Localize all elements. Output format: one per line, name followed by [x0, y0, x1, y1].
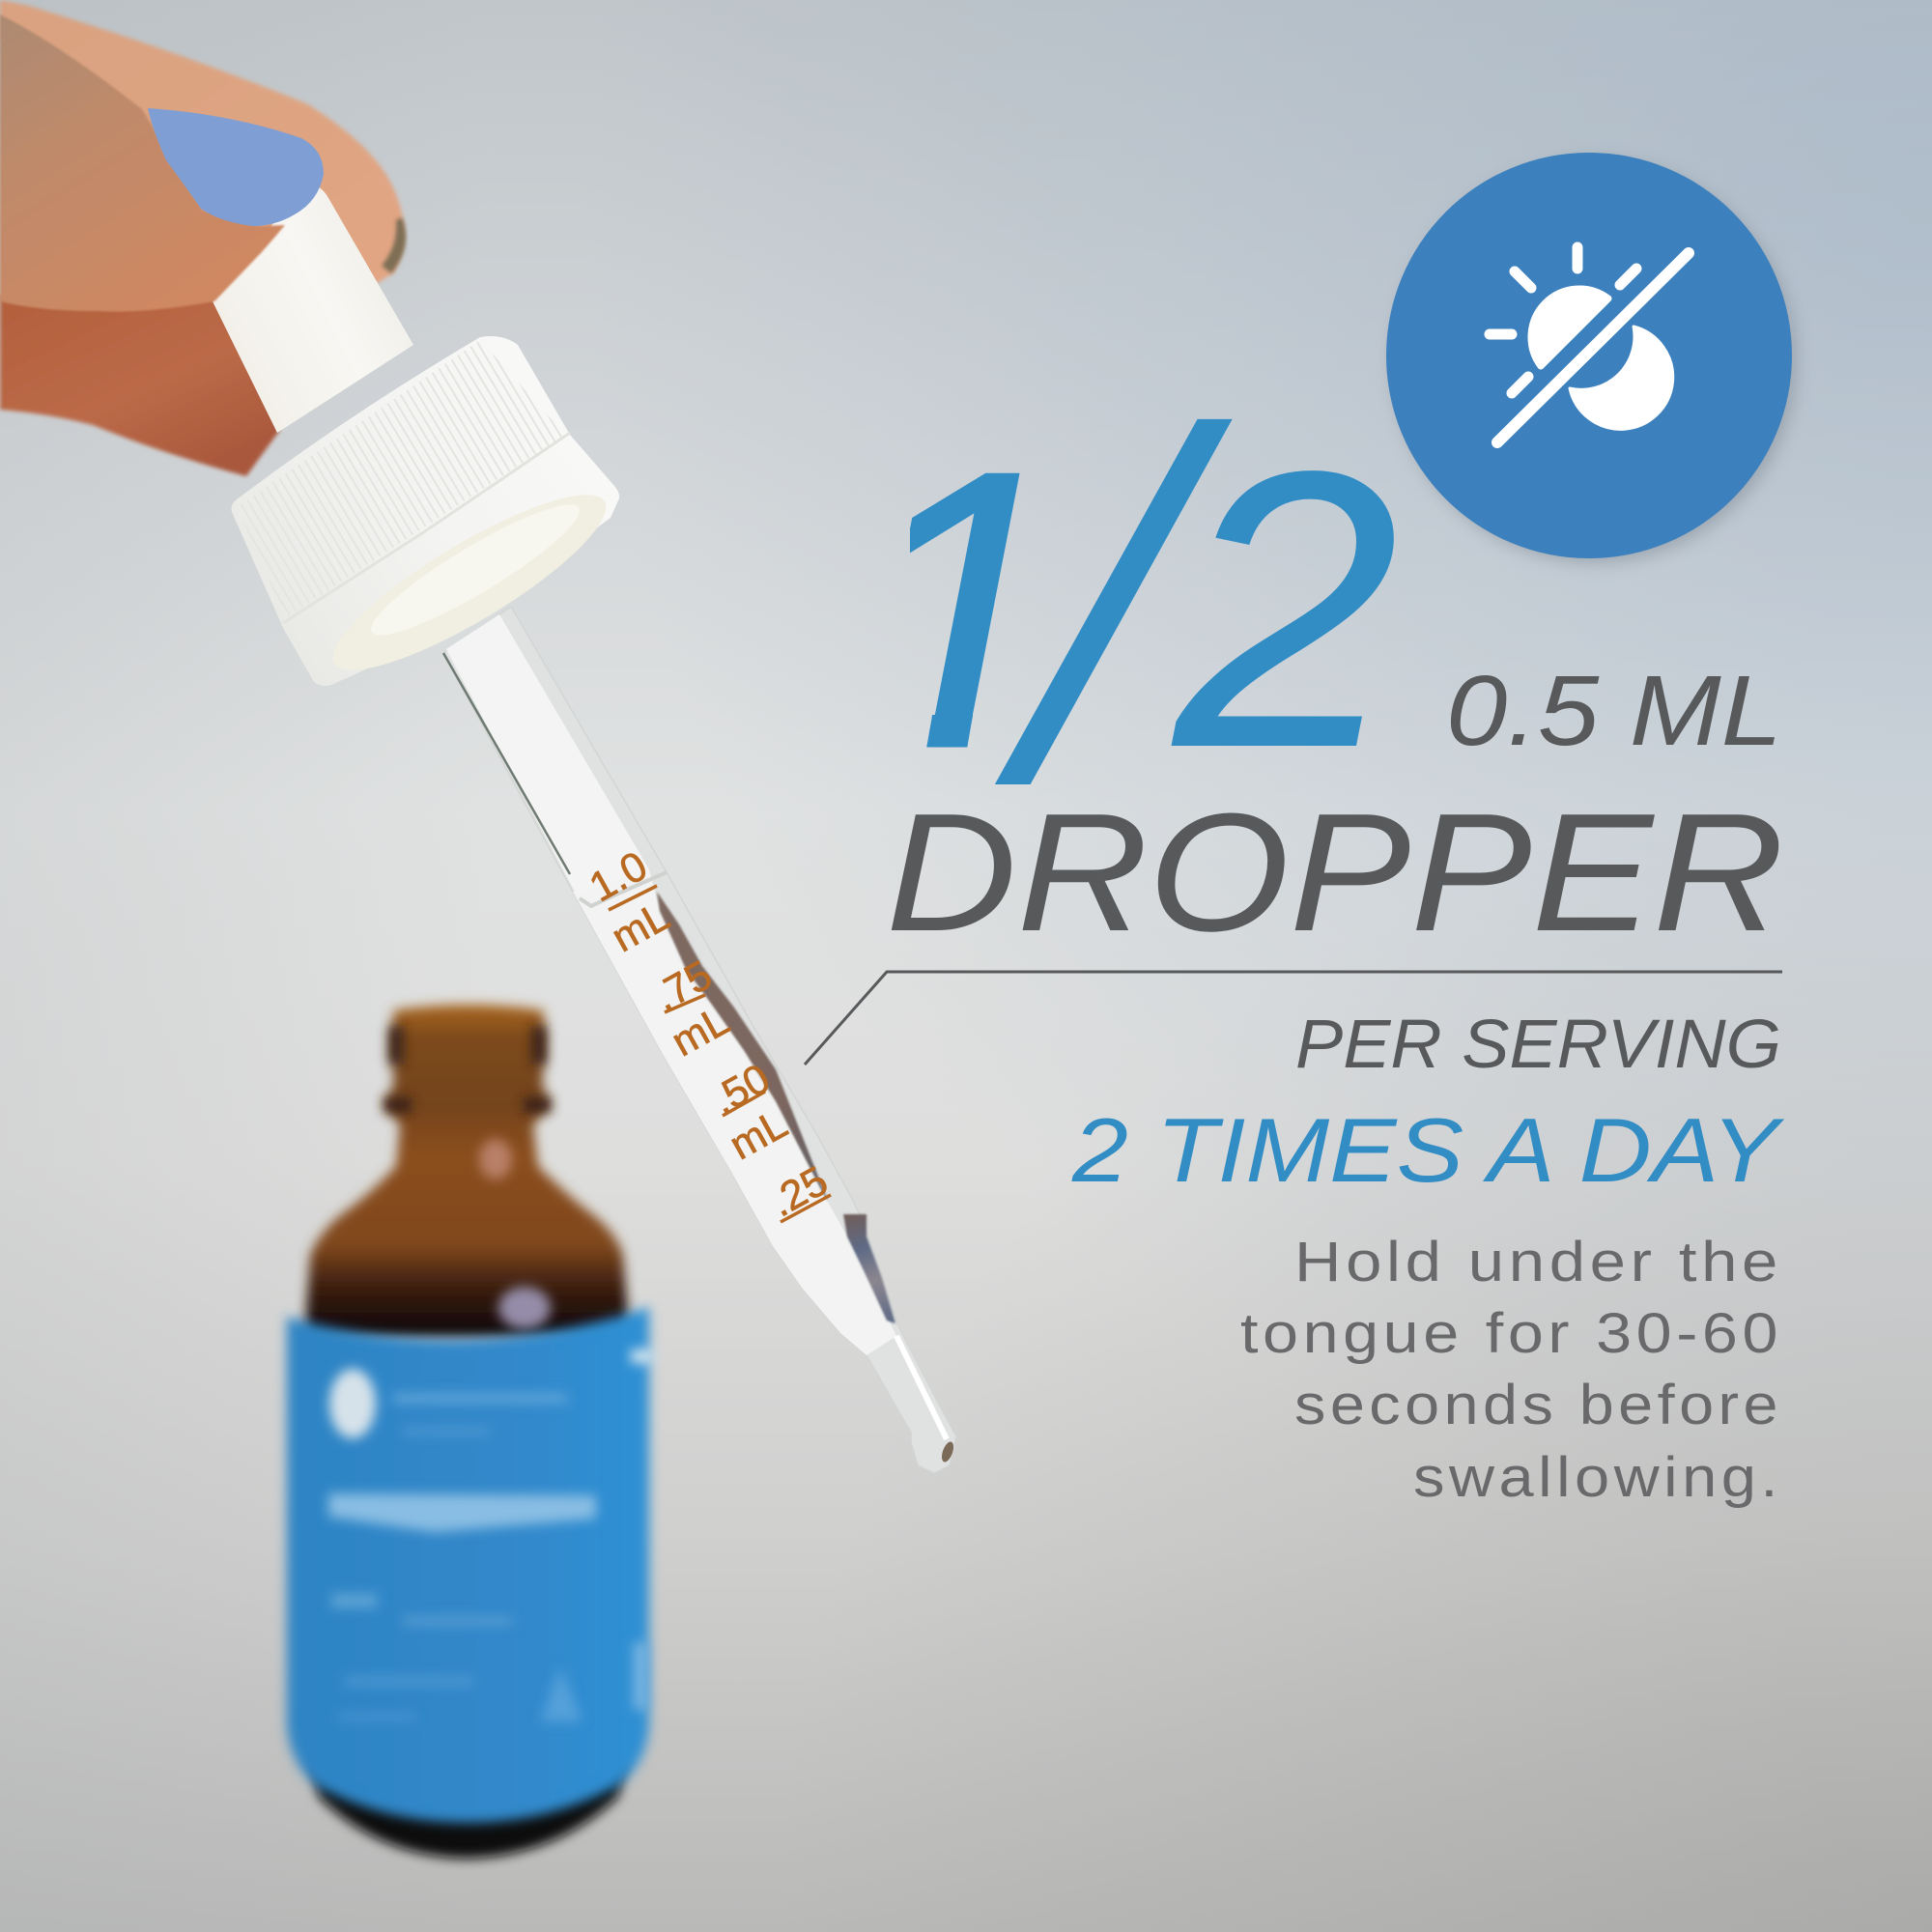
badge shadow [1394, 160, 1796, 562]
scale markings: mL [722, 1100, 795, 1169]
tip speck [940, 1440, 955, 1463]
fill ring [580, 872, 667, 906]
dropper bulb [213, 184, 413, 433]
scale markings: .25 [762, 1157, 836, 1226]
tube white interior lower [573, 869, 896, 1355]
instructions text: swallowing. [1413, 1446, 1782, 1509]
finger shadow edge [382, 217, 406, 273]
cap opening [315, 469, 624, 696]
headline: 1/2 fraction: 2 [1167, 390, 1400, 830]
tube clear glass [443, 607, 956, 1473]
bottle neck shading [384, 1026, 551, 1113]
tube white interior upper [446, 614, 649, 894]
lower finger [0, 290, 280, 476]
headline: 1/2 fraction: / [980, 329, 1249, 886]
hand holding dropper [0, 0, 413, 476]
bottle glass [304, 1005, 630, 1338]
scale markings: 1.0 [582, 842, 655, 911]
instructions text: Hold under the [1294, 1231, 1782, 1293]
instructions text: tongue for 30-60 [1240, 1302, 1782, 1365]
cap inner highlight [359, 488, 591, 652]
text: PER SERVING: PER SERVING [1295, 1007, 1781, 1083]
scale markings: mL [664, 997, 737, 1065]
dose amount: 0.5 ML: 0.5 ML [1446, 655, 1782, 766]
instructions text: seconds before [1294, 1374, 1782, 1436]
cap lip step [283, 433, 570, 623]
scale markings: mL [604, 893, 677, 961]
cap knurling [242, 342, 562, 603]
bottle highlights [479, 1139, 551, 1329]
bottle base [311, 1758, 626, 1859]
thumb nail [148, 108, 324, 226]
scale markings: .75 [646, 952, 720, 1020]
text: 2 TIMES A DAY: 2 TIMES A DAY [1071, 1099, 1785, 1201]
icon: sun and moon with slash [1490, 247, 1689, 442]
cap body [232, 336, 619, 686]
scale markings: .50 [704, 1055, 778, 1123]
blurred label print [328, 1350, 654, 1721]
index finger [0, 0, 404, 290]
tip highlight [896, 1336, 947, 1439]
headline: 1/2 fraction [910, 419, 1394, 784]
badge circle [1386, 153, 1792, 558]
liquid streak lower [843, 1214, 895, 1323]
icon badge: no day or night restriction [1386, 153, 1796, 562]
heading: DROPPER: DROPPER [886, 778, 1784, 966]
left glass edge [443, 653, 570, 874]
headline: 1/2 fraction: 1 [851, 390, 1070, 830]
scale markings [582, 842, 836, 1226]
liquid streak upper [657, 892, 828, 1201]
glass dropper tube [443, 607, 956, 1473]
callout leader line [805, 972, 1782, 1065]
blue label [287, 1307, 649, 1823]
blurred amber bottle with blue label [287, 1005, 654, 1859]
thumb [0, 14, 285, 312]
dropper cap [231, 333, 624, 696]
instructions text [1240, 1231, 1782, 1509]
